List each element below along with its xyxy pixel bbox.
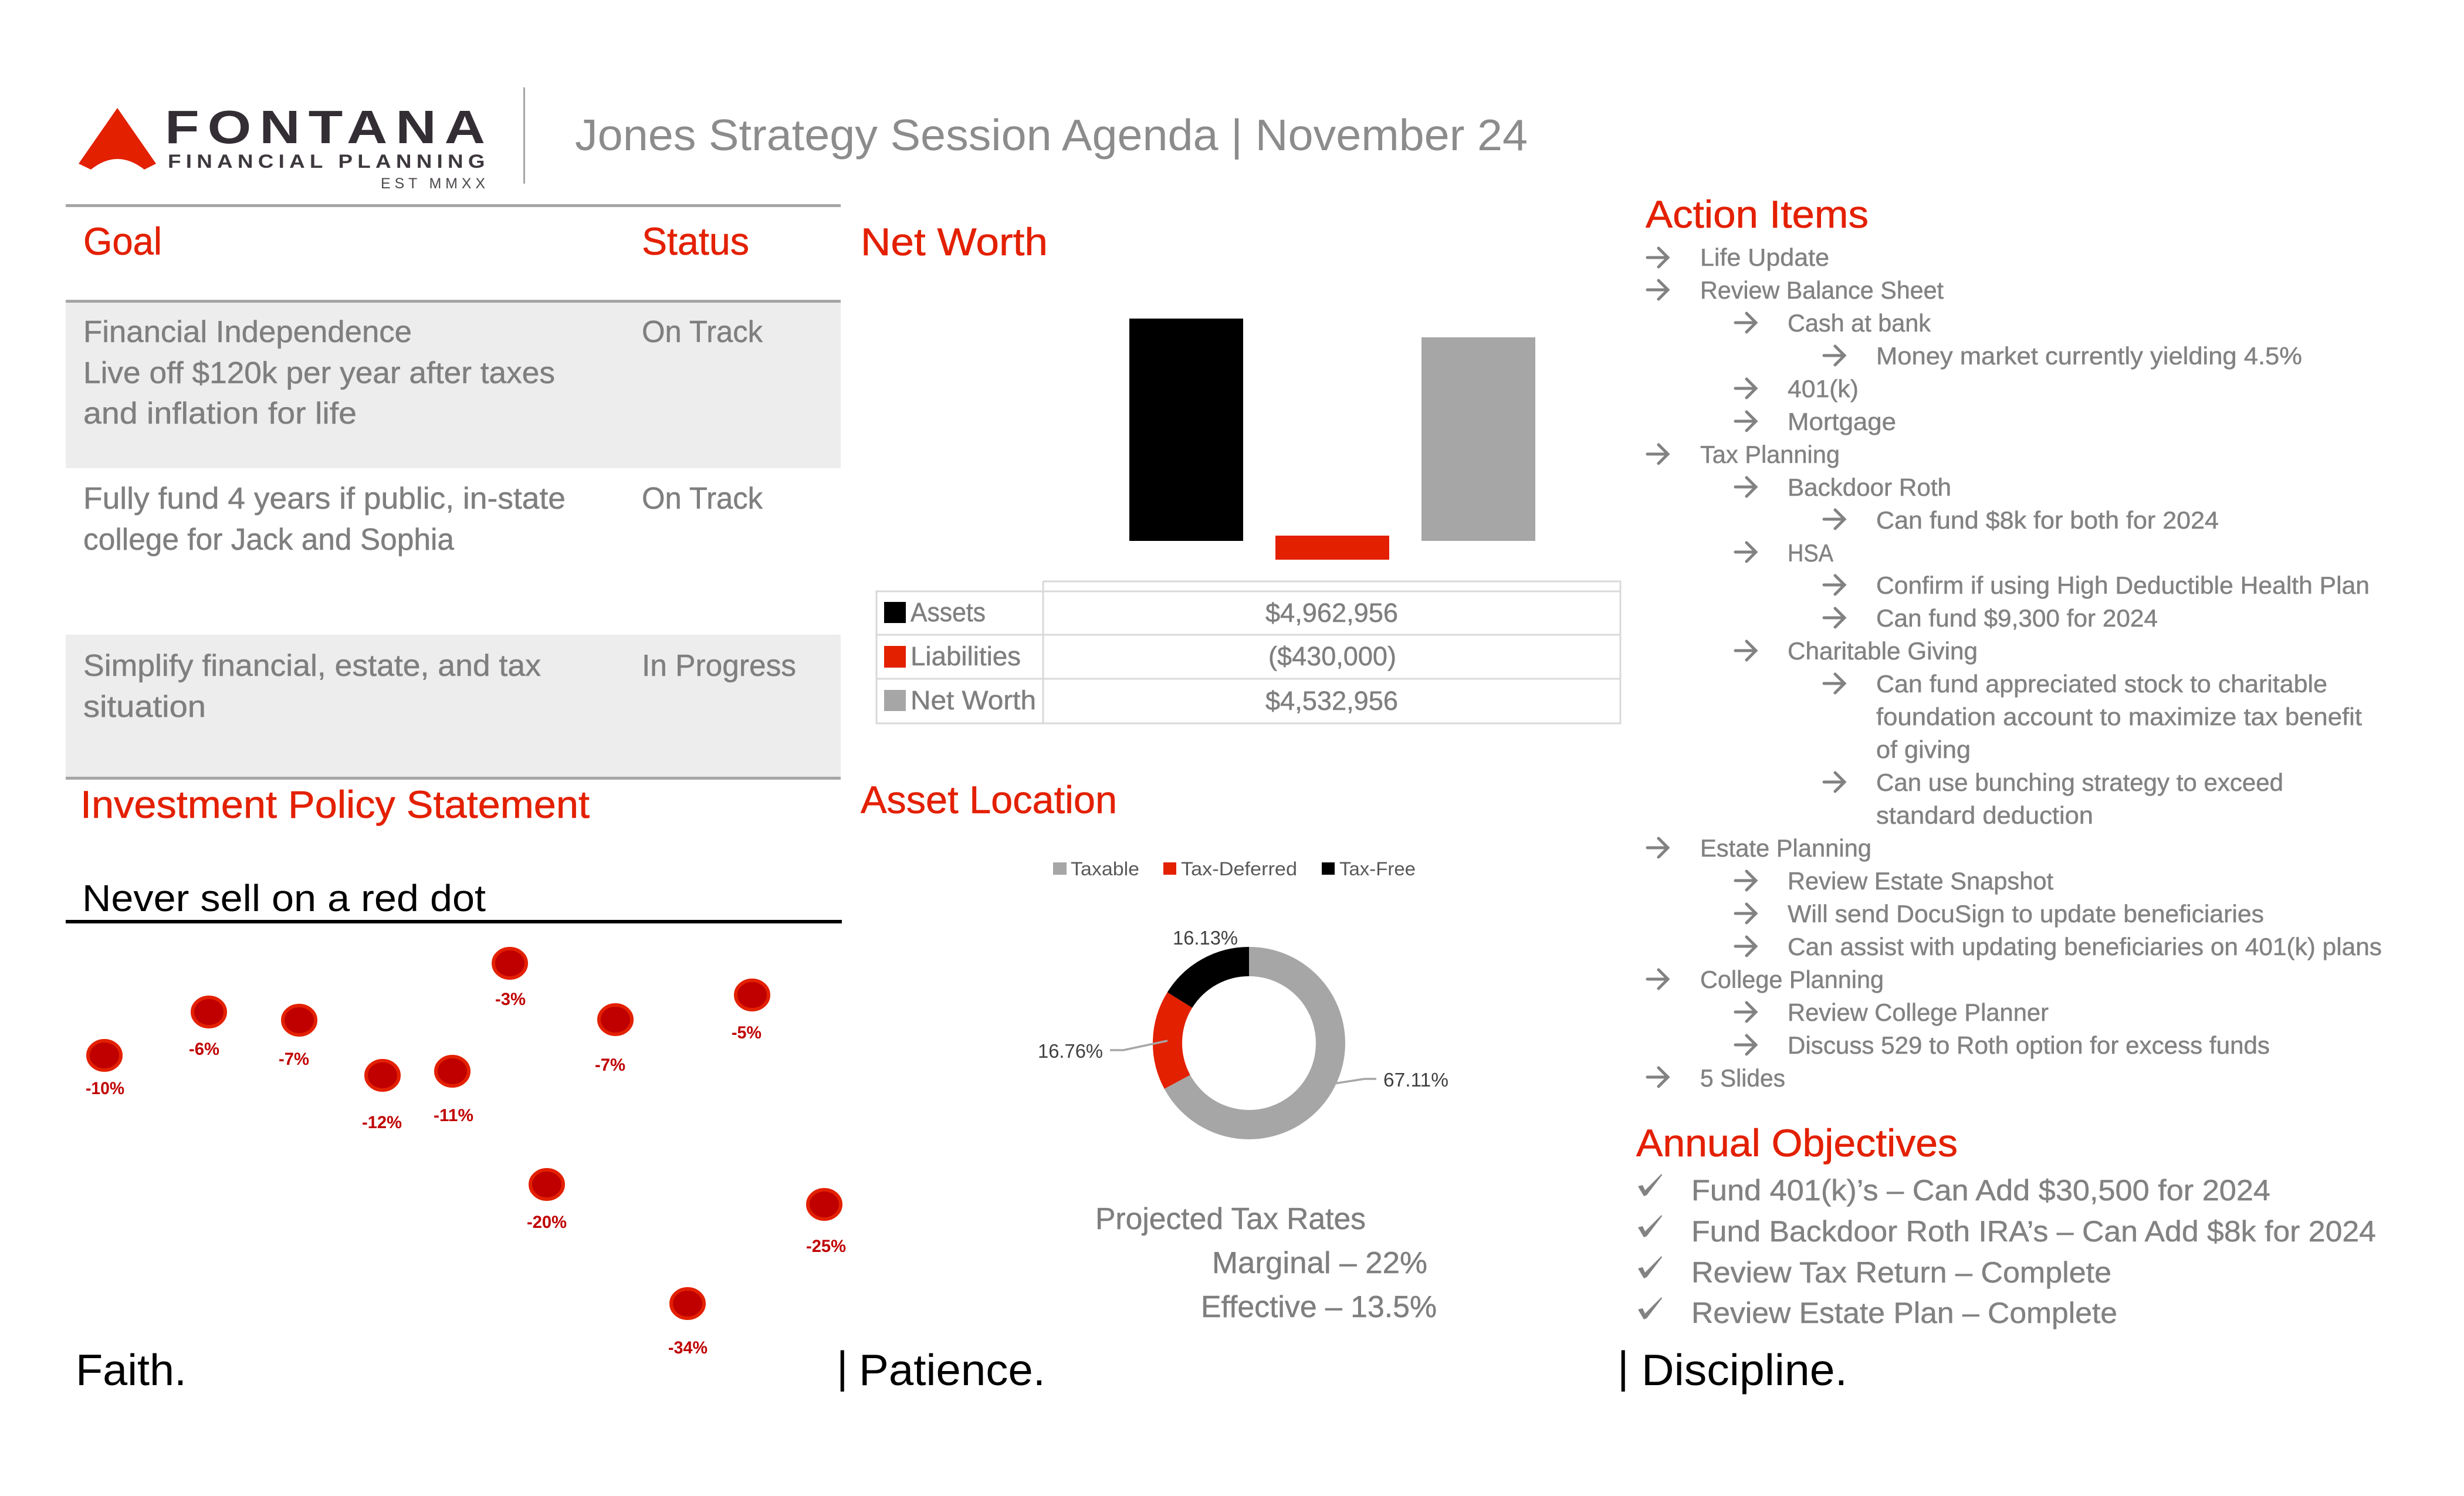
panel: investment policy statement — [66, 783, 846, 1358]
action list text: 401(k) — [1788, 375, 1859, 402]
row 1 goal: Financial Independence — [83, 315, 412, 349]
footer tagline — [76, 1342, 1847, 1395]
icon: red peak — [79, 108, 156, 170]
legend: Taxable — [1071, 858, 1139, 879]
chart: red dot drawdowns: -25% — [806, 1237, 846, 1256]
heading: goal: Goal — [83, 219, 162, 263]
logo wordmark: FONTANA — [165, 101, 485, 153]
chart: red dot drawdowns: -20% — [527, 1213, 567, 1232]
action list text: Mortgage — [1788, 408, 1896, 435]
data table: Assets — [911, 597, 986, 627]
action list text: 5 Slides — [1700, 1064, 1785, 1092]
icons: arrows — [1647, 248, 1844, 1087]
legend: Tax-Free — [1339, 858, 1416, 879]
row 1 goal — [83, 315, 555, 431]
action list text: Charitable Giving — [1788, 637, 1978, 665]
chart: red dot drawdowns: -7% — [279, 1050, 309, 1069]
row 3 goal: situation — [83, 690, 206, 724]
action list text: of giving — [1876, 736, 1971, 763]
objectives text: Review Estate Plan – Complete — [1691, 1297, 2117, 1329]
icons: checkmarks — [1638, 1174, 1662, 1319]
row 3 status: In Progress — [642, 649, 796, 683]
row 3 goal — [83, 649, 541, 724]
header — [79, 87, 1528, 192]
action list text: standard deduction — [1876, 801, 2093, 829]
action list text: HSA — [1788, 539, 1833, 567]
bar chart: net worth — [1129, 319, 1535, 560]
action list text: Cash at bank — [1788, 309, 1931, 337]
action list text: foundation account to maximize tax benefit — [1876, 703, 2362, 730]
chart: red dot drawdowns: -34% — [668, 1338, 708, 1358]
logo subtitle: FINANCIAL PLANNING — [168, 151, 485, 172]
row 1 goal: Live off $120k per year after taxes — [83, 356, 555, 390]
title: Jones Strategy Session Agenda | November 24 — [575, 110, 1528, 160]
heading: net worth: Net Worth — [861, 220, 1048, 263]
row 1 goal: and inflation for life — [83, 397, 357, 431]
chart: red dot drawdowns: -12% — [362, 1113, 402, 1132]
chart: red dot drawdowns: -7% — [595, 1055, 625, 1075]
chart: red dot drawdowns: -10% — [86, 1079, 124, 1098]
projected tax rates: Effective – 13.5% — [1201, 1290, 1437, 1324]
action list text: Life Update — [1700, 243, 1829, 271]
legend: Tax-Deferred — [1181, 858, 1297, 879]
tagline: discipline: | — [1617, 1342, 1629, 1392]
tagline: patience: Patience. — [859, 1345, 1045, 1395]
panel: goals table — [66, 204, 841, 780]
projected tax rates: Marginal – 22% — [1212, 1246, 1427, 1280]
heading: asset location: Asset Location — [861, 778, 1117, 821]
heading: annual objectives: Annual Objectives — [1636, 1121, 1958, 1165]
tagline: discipline: Discipline. — [1641, 1345, 1847, 1395]
donut chart: 67.11% — [1383, 1069, 1448, 1091]
action list text: Can assist with updating beneficiaries on 401(k) plans — [1788, 933, 2382, 960]
chart: red dot drawdowns: -5% — [732, 1023, 761, 1043]
tagline: faith: Faith. — [76, 1345, 187, 1395]
chart: red dot drawdowns — [86, 949, 846, 1358]
chart: red dot drawdowns: -6% — [189, 1040, 219, 1059]
row 2 goal — [83, 482, 566, 557]
data table: $4,962,956 — [1265, 598, 1398, 628]
heading: investment policy statement: Investment Policy Statement — [80, 783, 590, 826]
data table: Net Worth — [911, 685, 1036, 715]
chart: red dot drawdowns: -3% — [495, 990, 526, 1009]
row 1 status: On Track — [642, 315, 763, 349]
subheading: Never sell on a red dot — [82, 877, 486, 919]
action list text: Can fund $8k for both for 2024 — [1876, 506, 2219, 534]
objectives text: Fund 401(k)’s – Can Add $30,500 for 2024 — [1691, 1174, 2270, 1207]
action list text: Money market currently yielding 4.5% — [1876, 342, 2302, 370]
action list text: Discuss 529 to Roth option for excess funds — [1788, 1031, 2270, 1059]
action list text: Confirm if using High Deductible Health Plan — [1876, 571, 2370, 599]
donut chart — [1038, 927, 1448, 1125]
panel: annual objectives — [1636, 1121, 2376, 1329]
action list text: Review Estate Snapshot — [1788, 867, 2053, 895]
donut chart: 16.76% — [1038, 1040, 1103, 1062]
donut chart: 16.13% — [1173, 927, 1238, 949]
objectives text — [1691, 1174, 2376, 1329]
objectives text: Fund Backdoor Roth IRA’s – Can Add $8k for 2024 — [1691, 1215, 2376, 1248]
panel: net worth — [861, 220, 1620, 723]
action list text: Review Balance Sheet — [1700, 276, 1944, 304]
heading: action items: Action Items — [1646, 192, 1869, 236]
action list text: Review College Planner — [1788, 999, 2049, 1026]
tagline: patience: | — [837, 1342, 848, 1392]
data table: Liabilities — [911, 641, 1021, 671]
heading: status: Status — [642, 219, 749, 263]
legend — [1053, 858, 1416, 879]
action list text: Estate Planning — [1700, 834, 1871, 862]
data table — [876, 581, 1620, 723]
projected tax rates — [1095, 1202, 1437, 1324]
action list text — [1700, 243, 2382, 1092]
action list text: Can fund appreciated stock to charitable — [1876, 670, 2327, 698]
row 2 status: On Track — [642, 482, 763, 516]
logo: Fontana Financial Planning — [79, 101, 485, 192]
action list text: Can fund $9,300 for 2024 — [1876, 604, 2158, 632]
objectives text: Review Tax Return – Complete — [1691, 1256, 2111, 1289]
action list text: Tax Planning — [1700, 441, 1840, 468]
action list text: Can use bunching strategy to exceed — [1876, 769, 2283, 796]
row 2 goal: Fully fund 4 years if public, in-state — [83, 482, 566, 516]
data table: $4,532,956 — [1265, 686, 1398, 716]
logo established line: EST MMXX — [381, 175, 485, 192]
row 2 goal: college for Jack and Sophia — [83, 523, 454, 557]
row 3 goal: Simplify financial, estate, and tax — [83, 649, 541, 683]
action list text: Will send DocuSign to update beneficiaries — [1788, 900, 2264, 928]
panel: asset location — [861, 778, 1448, 1324]
action list text: College Planning — [1700, 966, 1884, 993]
panel: action items — [1646, 192, 2382, 1092]
action list text: Backdoor Roth — [1788, 473, 1951, 501]
chart: red dot drawdowns: -11% — [434, 1106, 473, 1125]
data table: ($430,000) — [1268, 641, 1396, 671]
projected tax rates: Projected Tax Rates — [1095, 1202, 1366, 1236]
